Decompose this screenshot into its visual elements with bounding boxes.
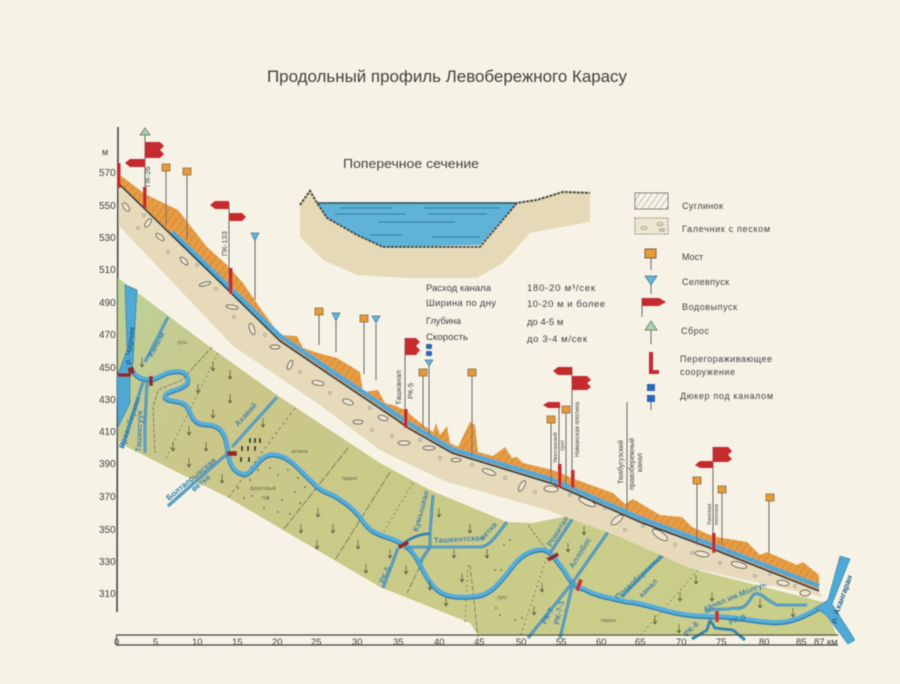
lining <box>300 191 590 247</box>
legend: barrier structure <box>651 352 772 377</box>
land-use labels: луга <box>177 340 187 346</box>
barrier structures <box>117 163 716 553</box>
legend: loam: Суглинок <box>682 201 723 211</box>
legend: spillway: Сброс <box>681 326 710 336</box>
canal water <box>172 232 819 586</box>
canal parameters: 180-20 м³/сек <box>527 283 596 294</box>
km scale bar: 40 <box>434 637 445 648</box>
canal name labels: Аллобос <box>567 535 593 570</box>
elevation axis: 550 <box>99 201 116 212</box>
river Akhangaran <box>815 556 855 644</box>
main canal <box>132 370 820 623</box>
canal name labels: ветка <box>190 472 212 494</box>
canal bed line <box>120 185 819 591</box>
canal name labels: Ташкесуук <box>134 409 144 452</box>
canal name labels: РК-5 <box>378 565 393 585</box>
canal parameters: до 4-5 м <box>527 317 563 328</box>
markers on profile <box>117 128 774 553</box>
field boundaries <box>153 347 698 638</box>
elevation axis: 370 <box>99 492 116 503</box>
canal parameters <box>426 283 605 345</box>
canal name labels: Правобережный <box>613 550 667 601</box>
km scale bar <box>114 635 838 648</box>
elevation axis: 490 <box>99 298 116 309</box>
poles <box>145 133 769 553</box>
legend: water outlet: Водовыпуск <box>682 302 737 312</box>
title: Продольный профиль Левобережного Карасу <box>267 67 627 86</box>
land-use labels: сад <box>261 495 269 501</box>
km scale bar: 75 <box>716 637 727 648</box>
canal name labels: Ромитан <box>545 514 571 548</box>
vertical structure labels: Тюябугузский <box>617 440 625 484</box>
vertical structure labels: ПК-26 <box>143 166 152 187</box>
land strip <box>118 278 838 638</box>
km scale bar: 25 <box>311 637 322 648</box>
canal name labels: РК-7 <box>540 606 556 626</box>
canal parameters: Ширина по дну <box>426 298 496 309</box>
canal name labels: р. Ахангаран <box>828 574 854 625</box>
vertical structure labels: РК-5 <box>406 383 415 399</box>
km scale bar: 35 <box>393 637 404 648</box>
legend: culvert <box>647 384 773 410</box>
km scale bar: км <box>827 637 838 648</box>
cross-section heading: Поперечное сечение <box>343 156 479 171</box>
elevation axis: 350 <box>99 525 116 536</box>
legend: spillway <box>645 321 710 344</box>
km scale bar: 87 <box>814 637 825 648</box>
branch canals <box>122 317 807 640</box>
vertical structure labels: Ханская <box>707 504 713 525</box>
mudflow passages <box>251 233 433 366</box>
vertical structure labels: Уватганский <box>552 432 559 463</box>
culverts under canal <box>426 344 432 356</box>
small gravel <box>137 214 796 587</box>
legend: culvert: Дюкер под каналом <box>680 391 773 401</box>
km scale bar: 45 <box>474 637 485 648</box>
elevation axis: 330 <box>99 557 116 568</box>
panel: longitudinal profile <box>119 175 823 597</box>
legend: mudflow passage <box>645 276 729 294</box>
land-use labels: пашня <box>342 476 357 482</box>
buildings <box>240 438 261 462</box>
ripple lines <box>335 208 500 237</box>
land-use labels <box>177 340 616 624</box>
structures on plan <box>118 366 719 622</box>
vertical structure labels: плотина <box>714 503 720 525</box>
vertical structure labels: трот <box>560 439 566 451</box>
km scale bar: 70 <box>676 637 687 648</box>
canal name labels: Болтаорыкская <box>165 456 218 503</box>
land-use labels: фруктовый <box>250 485 276 492</box>
canal name labels: Ханым <box>146 330 167 359</box>
elevation axis: 510 <box>99 265 116 276</box>
legend: gravel with sand <box>635 218 770 234</box>
legend: loam <box>635 193 723 211</box>
canal name labels: ветка <box>478 520 499 542</box>
km scale bar: 20 <box>272 637 283 648</box>
km scale bar: 80 <box>759 637 770 648</box>
elevation axis: 570 <box>99 168 116 179</box>
canal name labels: Ташкентская <box>434 533 485 545</box>
canal parameters: Расход канала <box>426 283 492 294</box>
canal name labels: Кумышкан <box>411 490 431 533</box>
elevation axis: 470 <box>99 330 116 341</box>
vertical structure labels: Наманская плотина <box>575 401 581 457</box>
vertical structure labels: правобережный <box>628 438 636 490</box>
land-use labels: луга <box>497 595 507 601</box>
water <box>317 203 517 247</box>
elevation axis: 390 <box>99 459 116 470</box>
km scale bar: 65 <box>635 637 646 648</box>
canal name labels: канал <box>637 577 660 599</box>
canal parameters: Скорость <box>426 332 468 343</box>
drainage arrows <box>140 358 795 633</box>
elevation axis: 410 <box>99 427 116 438</box>
outlet flags <box>125 142 732 468</box>
canal name labels: канал им.Молгуненкова <box>702 569 794 613</box>
legend: bridge <box>645 249 703 270</box>
elevation axis: 310 <box>99 589 116 600</box>
land-use labels: целина <box>291 449 308 455</box>
vertical structure labels: Ташканал <box>394 370 403 405</box>
canal parameters: Глубина <box>426 316 462 327</box>
km scale bar: 15 <box>232 637 243 648</box>
gravel and sand layer <box>119 186 823 597</box>
km scale bar: 5 <box>153 637 158 648</box>
km scale bar: 55 <box>556 637 567 648</box>
canal name labels: РК-8 <box>682 619 701 638</box>
river Chirchik <box>117 285 137 427</box>
loam layer <box>120 175 819 590</box>
panel: plan view of canal on green land <box>117 278 855 644</box>
vertical structure labels: канал <box>637 453 644 472</box>
canal name labels: Правобережн <box>117 395 143 450</box>
legend: barrier structure: сооружение <box>680 367 735 377</box>
legend: bridge: Мост <box>682 252 703 262</box>
elevation axis: м <box>102 147 108 157</box>
canal name labels: РК-9 <box>728 612 747 627</box>
drain arrow: top of profile <box>140 128 150 135</box>
legend: gravel with sand: Галечник с песком <box>682 224 770 234</box>
vertical structure labels <box>143 166 720 525</box>
canal parameters: до 3-4 м/сек <box>527 334 588 345</box>
legend: mudflow passage: Селевпуск <box>682 277 729 287</box>
km scale bar: 0 <box>114 637 119 648</box>
km scale bar: 60 <box>596 637 607 648</box>
canal name labels: Ахавай <box>233 401 259 428</box>
elevation axis <box>99 127 118 612</box>
km scale bar: 10 <box>192 637 203 648</box>
canal parameters: 10-20 м и более <box>527 299 605 310</box>
elevation axis: 430 <box>99 395 116 406</box>
pebbles <box>121 202 810 596</box>
legend <box>635 193 773 410</box>
elevation axis: 450 <box>99 363 116 374</box>
orchard dots <box>237 467 523 621</box>
km scale bar: 50 <box>516 637 527 648</box>
km scale bar: 30 <box>352 637 363 648</box>
panel: cross-section drawing <box>300 191 590 278</box>
land-use labels: пашня <box>601 618 616 624</box>
soil <box>300 191 590 278</box>
elevation axis: 530 <box>99 233 116 244</box>
canal name labels: РК-7-1 <box>552 599 566 625</box>
canal name labels: р. Чирчик <box>123 325 137 365</box>
canal name labels <box>117 325 854 638</box>
legend: barrier structure: Перегораживающее <box>680 354 772 364</box>
vertical structure labels: ПК-133 <box>220 231 229 256</box>
legend: water outlet <box>642 298 737 317</box>
bridges <box>162 164 774 501</box>
km scale bar: 85 <box>796 637 807 648</box>
